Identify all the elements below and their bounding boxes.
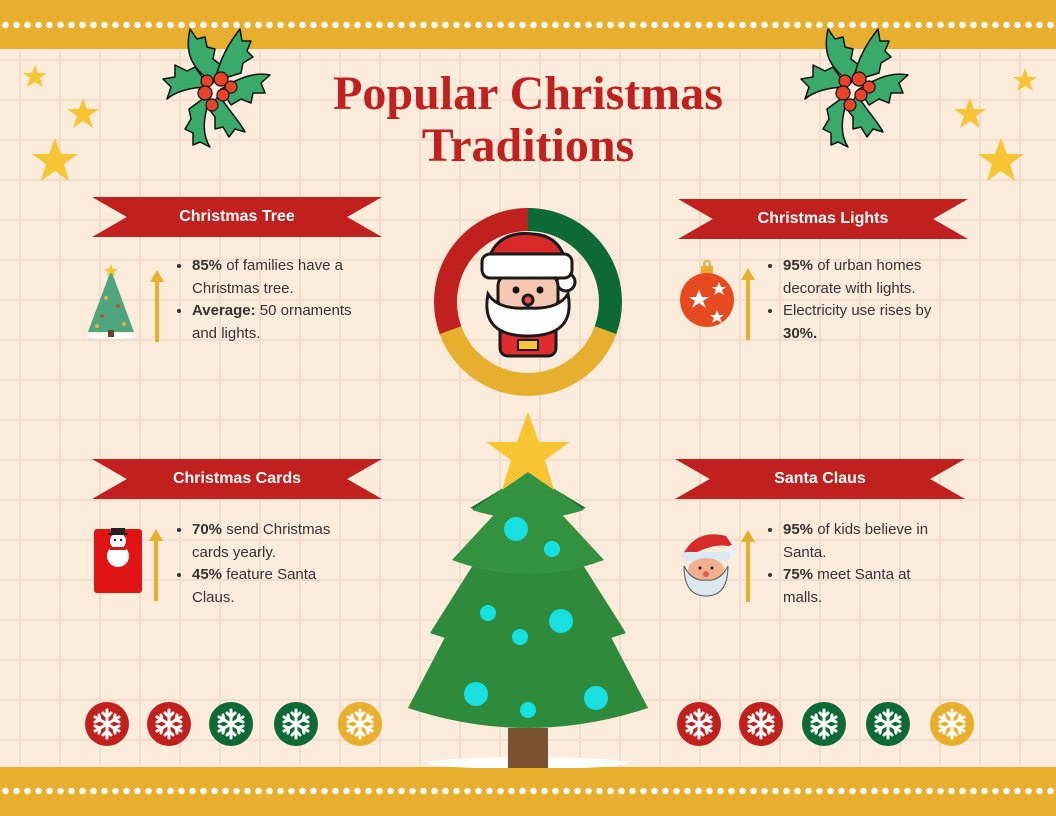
text: 75% meet Santa at malls. <box>783 566 911 606</box>
heading ribbon: Christmas Lights <box>758 210 888 227</box>
text <box>177 521 330 606</box>
donut chart with santa <box>434 208 622 396</box>
panel: christmas lights <box>678 199 968 342</box>
icon: stars left <box>23 65 99 181</box>
arrow <box>741 530 755 602</box>
arrow <box>150 270 164 342</box>
icon: holly left <box>162 28 271 148</box>
text: 95% of kids believe in Santa. <box>783 521 928 560</box>
arrow <box>149 529 163 601</box>
arrow <box>741 268 755 340</box>
panel: santa claus <box>675 459 965 606</box>
icon: card with snowman <box>94 528 142 593</box>
panel: christmas cards <box>92 459 382 606</box>
top band <box>0 0 1056 49</box>
icon: holly right <box>800 28 909 148</box>
snowflakes left <box>85 702 382 746</box>
title: Popular Christmas Traditions <box>333 67 723 172</box>
text: 85% of families have a Christmas tree. <box>192 257 343 296</box>
heading ribbon <box>675 459 965 499</box>
heading ribbon: Christmas Tree <box>179 208 295 225</box>
text <box>768 521 928 606</box>
heading ribbon: Christmas Cards <box>173 470 301 487</box>
text <box>177 257 352 342</box>
snowflakes right <box>677 702 974 746</box>
text: Average: 50 ornaments and lights. <box>192 302 352 342</box>
text: Electricity use rises by 30%. <box>783 302 931 342</box>
icon: stars right <box>954 68 1037 181</box>
icon: santa <box>482 234 575 356</box>
panel: christmas tree <box>87 197 382 342</box>
text: 95% of urban homes decorate with lights. <box>783 257 921 296</box>
text <box>768 257 932 342</box>
text: 70% send Christmas cards yearly. <box>192 521 330 560</box>
heading ribbon <box>92 459 382 499</box>
heading ribbon <box>92 197 382 237</box>
heading ribbon: Santa Claus <box>774 470 866 487</box>
big christmas tree <box>408 412 648 768</box>
icon: ornament <box>680 260 734 327</box>
heading ribbon <box>678 199 968 239</box>
icon: santa face <box>682 534 737 596</box>
icon: small tree <box>87 264 135 339</box>
text: 45% feature Santa Claus. <box>192 566 316 606</box>
bottom band <box>0 767 1056 816</box>
